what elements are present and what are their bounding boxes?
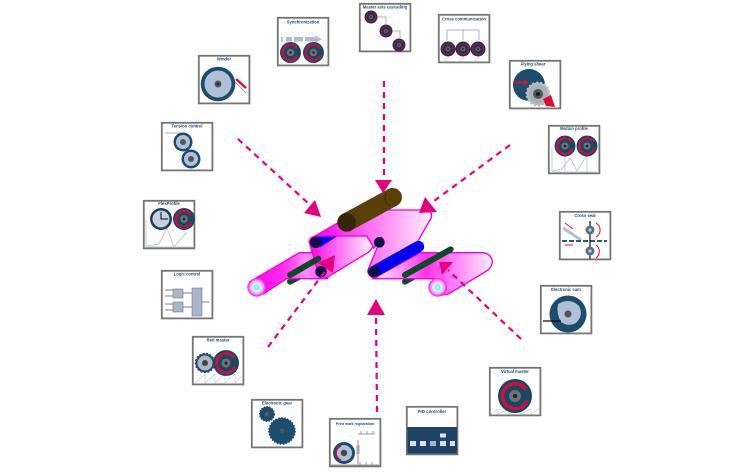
- icon: saw profile: [195, 374, 242, 383]
- icon: reel: [201, 67, 235, 101]
- roller: lower idler: [315, 266, 327, 277]
- panel: central web machine: [247, 193, 492, 297]
- roller: left green: [290, 259, 318, 275]
- heading: Electronic gear: Electronic gear: [262, 400, 292, 406]
- web: lower left band: [250, 253, 340, 294]
- heading: Cross seal: Cross seal: [574, 213, 596, 218]
- roller: lower right green: [405, 276, 415, 282]
- panel: Flying shear: [510, 61, 560, 108]
- icon: cam follower: [543, 320, 561, 322]
- icon: lower roller: [182, 150, 200, 168]
- icon: wheel: [498, 379, 532, 413]
- roller: right supply roll: [428, 278, 447, 297]
- icon: speed arrow: [281, 36, 322, 43]
- panel: Red master: [193, 337, 243, 384]
- heading: Flying shear: Flying shear: [521, 62, 546, 66]
- roller: right green: [405, 249, 451, 275]
- icon: web line: [165, 132, 181, 134]
- heading: FlexProfile: FlexProfile: [158, 201, 180, 206]
- icon: large gear: [269, 418, 295, 444]
- icon: red cut piece: [543, 95, 555, 107]
- roller: left supply roll: [247, 278, 266, 297]
- panel: Synchronization: [278, 18, 328, 65]
- heading: Winder: Winder: [217, 56, 231, 62]
- icon: wires: [165, 290, 209, 310]
- heading: Red master: Red master: [207, 338, 230, 342]
- panel: Virtual master: [490, 368, 540, 415]
- panel: Cross seal: [560, 212, 610, 259]
- panel: Print mark registration: [330, 419, 380, 466]
- panel: Cross communication: [439, 15, 489, 62]
- roller: lower left green: [290, 276, 301, 282]
- icon: red arrow: [513, 80, 529, 85]
- icon: red arrow: [235, 79, 246, 93]
- web: right band: [373, 253, 492, 296]
- icon: web: [562, 228, 607, 241]
- icon: arrows: [377, 17, 400, 38]
- roller: left navy idler: [310, 237, 337, 248]
- roller: right idler: [374, 237, 385, 248]
- icon: marks: [331, 431, 379, 465]
- heading: Cross communication: Cross communication: [442, 16, 486, 22]
- icon: red arrows: [565, 223, 600, 258]
- heading: Logic control: Logic control: [174, 272, 200, 276]
- heading: Motion profile: Motion profile: [560, 126, 589, 131]
- icon: upper roller: [174, 132, 192, 152]
- icon: seal rollers: [586, 221, 594, 259]
- icon: bus lines: [447, 30, 479, 40]
- icon: drum: [513, 69, 545, 101]
- web: middle band: [309, 236, 372, 279]
- panel: Master axis cascading: [360, 4, 410, 52]
- panel: Motion profile: [549, 126, 599, 173]
- icon: controller board: [407, 427, 457, 454]
- icon: saw profile: [443, 57, 479, 62]
- icon: wheel: [173, 208, 195, 230]
- arrow: top left: [238, 139, 321, 217]
- panel: FlexProfile: [144, 201, 195, 248]
- icon: wheel: [213, 350, 239, 376]
- heading: Synchronization: Synchronization: [287, 20, 320, 24]
- icon: clock: [150, 208, 172, 230]
- panel: Electronic cam: [541, 286, 591, 333]
- icon: cam disc: [550, 296, 586, 332]
- icon: two wheels: [280, 42, 324, 63]
- icon: small gear: [260, 407, 274, 421]
- panel: Winder: [199, 56, 249, 103]
- panel: Tension control: [162, 123, 212, 170]
- panel: Logic control: [162, 271, 212, 318]
- arrow: bottom right: [439, 262, 521, 339]
- heading: Master axis cascading: Master axis cascading: [363, 4, 408, 10]
- heading: PID controller: PID controller: [418, 409, 447, 414]
- icon: profile chart: [552, 147, 597, 172]
- roller: blue: [368, 247, 418, 277]
- icon: three wheels: [440, 42, 486, 56]
- icon: sensor: [356, 440, 360, 464]
- roller: brown cylinder: [337, 193, 393, 232]
- heading: Print mark registration: Print mark registration: [336, 422, 374, 426]
- icon: gear: [196, 354, 214, 372]
- arrow: top right: [419, 145, 510, 213]
- arrow: bottom left: [268, 255, 335, 347]
- arrow: top: [375, 81, 392, 193]
- icon: chart: [146, 220, 193, 247]
- arrow: bottom: [367, 299, 385, 412]
- icon: cascaded wheels: [364, 10, 406, 52]
- panel: PID controller: [407, 407, 457, 454]
- icon: wheels: [554, 136, 598, 156]
- icon: gear cutter: [526, 82, 550, 106]
- heading: Electronic cam: Electronic cam: [551, 287, 581, 292]
- heading: Virtual master: Virtual master: [501, 369, 529, 374]
- icon: logic blocks: [173, 288, 202, 316]
- panel: Electronic gear: [252, 400, 302, 447]
- icon: saw profile: [491, 409, 539, 414]
- heading: Tension control: Tension control: [171, 124, 203, 128]
- icon: wheel: [333, 442, 355, 464]
- web: upper band: [311, 210, 432, 279]
